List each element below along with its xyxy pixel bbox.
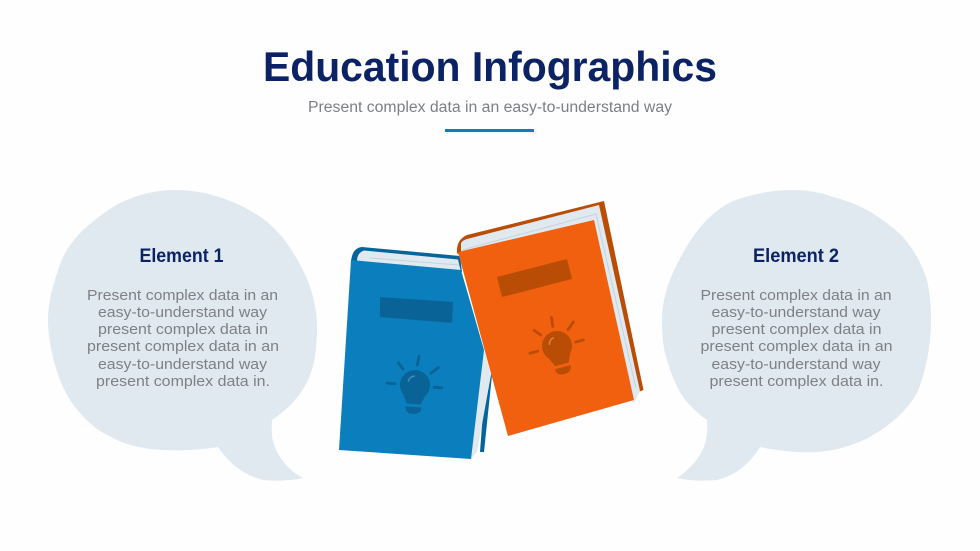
icon: blue book [339,247,492,459]
blue bulb glass [398,369,431,415]
text block: element 1 body: Present complex data in an [87,287,278,304]
text block: element 2 body: easy-to-understand way [712,304,881,321]
text block: element 1 body [87,287,279,390]
bubble shape right [662,190,931,481]
text block: element 2 body: present complex data in an [700,338,892,355]
subtitle: Present complex data in an easy-to-understand way [308,99,672,116]
blue book page edge line [370,258,459,265]
orange book cover [458,220,634,436]
heading: Element 1: Element 1 [140,246,224,267]
orange book back cover [457,201,644,393]
blue bulb rays [387,354,444,388]
heading: Element 2: Element 2 [753,246,839,267]
bubble shape left [48,190,317,481]
text block: element 2 body [700,287,892,390]
blue bulb highlight [408,376,415,382]
title underline [445,129,534,132]
orange book pages [461,205,640,403]
text block: element 2 body: present complex data in [712,321,882,338]
icon: orange book [457,201,644,436]
orange bulb rays [522,311,583,354]
blue book back cover [351,247,492,452]
blue book pages [357,250,491,459]
text block: element 1 body: present complex data in. [96,373,270,390]
title: Education Infographics [263,43,717,90]
orange bulb highlight [548,338,555,345]
text block: element 1 body: easy-to-understand way [98,304,268,321]
panel: element 1 speech bubble [48,190,317,481]
blue book cover [339,260,484,459]
panel: element 2 speech bubble [662,190,931,481]
icon: orange book light bulb [522,311,591,381]
text block: element 2 body: Present complex data in an [700,287,892,304]
orange book page edge line [462,214,636,388]
blue book label [380,297,453,323]
orange book label [497,259,572,297]
icon: blue book light bulb [385,354,444,416]
text block: element 2 body: present complex data in. [710,373,884,390]
orange bulb glass [539,328,579,378]
text block: element 1 body: easy-to-understand way [98,356,268,373]
text block: element 2 body: easy-to-understand way [712,356,881,373]
text block: element 1 body: present complex data in an [87,338,279,355]
text block: element 1 body: present complex data in [98,321,268,338]
